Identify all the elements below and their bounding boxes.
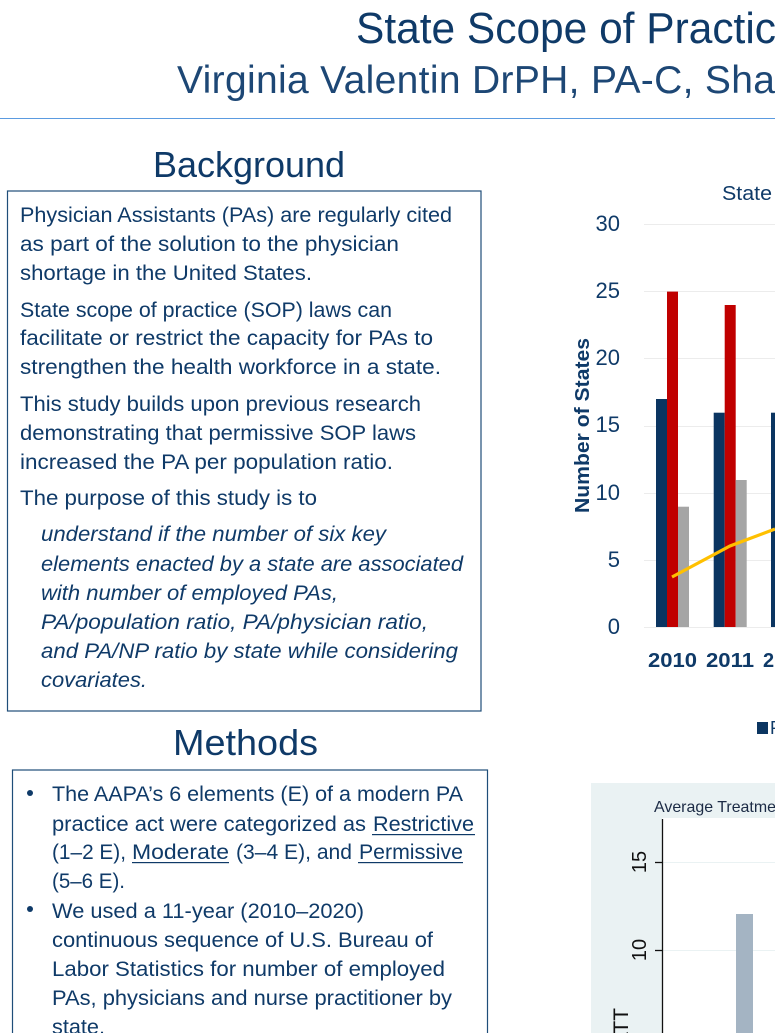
panel: background: elements enacted by a state are associated [41,552,464,576]
panel: background: The purpose of this study is to [20,486,317,510]
heading: methods: Methods [173,722,318,763]
panel: background: This study builds upon previous research [20,392,421,416]
panel: methods: (3–4 E), and [236,840,352,864]
panel: background: increased the PA per population ratio. [20,450,393,474]
panel: background: Physician Assistants (PAs) are regularly cited [20,203,452,227]
title: Virginia Valentin DrPH, PA-C, Sha [177,59,775,102]
panel: methods: We used a 11-year (2010–2020) [52,899,364,923]
y axis labels: 25 [596,278,620,303]
y axis labels: 15 [596,412,620,437]
y axis labels [596,211,620,639]
panel: background: strengthen the health workforce in a state. [20,355,441,379]
panel: background: PA/population ratio, PA/physician ratio, [41,610,428,634]
panel: background: as part of the solution to the physician [20,232,399,256]
panel: methods [12,770,488,1033]
axis labels [610,851,651,1033]
x axis labels: 2 [763,650,774,672]
heading: background: Background [153,144,345,185]
x axis labels: 2010 [648,650,697,672]
chart: average treatment effect [591,783,775,1033]
panel: background: State scope of practice (SOP) laws can [20,298,392,322]
panel: background: understand if the number of six key [41,522,387,546]
y axis title: Number of States [572,338,594,513]
legend [757,718,775,738]
bars [656,292,775,627]
panel: background [8,191,481,711]
panel: methods: Permissive [359,840,463,864]
panel: methods: practice act were categorized as [52,812,366,836]
panel: methods: The AAPA’s 6 elements (E) of a modern PA [52,782,464,806]
title [177,4,775,102]
panel: background: and PA/NP ratio by state while considering [41,639,458,663]
bar [736,914,753,1033]
chart title: Average Treatme [654,799,775,816]
axis labels: 10 [629,939,651,961]
panel: background: with number of employed PAs, [41,581,338,605]
trend line [672,529,775,577]
panel: background: facilitate or restrict the capacity for PAs to [20,326,433,350]
panel: background: covariates. [41,668,147,692]
axis [655,819,662,1033]
y axis labels: 10 [596,480,620,505]
panel: methods: Moderate [132,840,229,864]
panel: methods: Restrictive [373,812,474,836]
x axis labels [648,650,774,672]
panel: background: shortage in the United States. [20,261,312,285]
panel: methods: PAs, physicians and nurse practitioner by [52,986,452,1010]
chart: state laws by year [572,183,775,738]
x axis labels: 2011 [706,650,754,672]
chart title: State [722,183,772,205]
panel: background: demonstrating that permissive SOP laws [20,421,416,445]
y axis labels: 30 [596,211,620,236]
panel: methods: continuous sequence of U.S. Bureau of [52,928,433,952]
panel: methods: (5–6 E). [52,869,125,893]
y axis labels: 5 [608,547,620,572]
y axis labels: 20 [596,345,620,370]
axis labels: 15 [629,851,651,873]
y axis labels: 0 [608,614,620,639]
panel: methods: (1–2 E), [52,840,126,864]
panel: methods: Labor Statistics for number of employed [52,957,445,981]
